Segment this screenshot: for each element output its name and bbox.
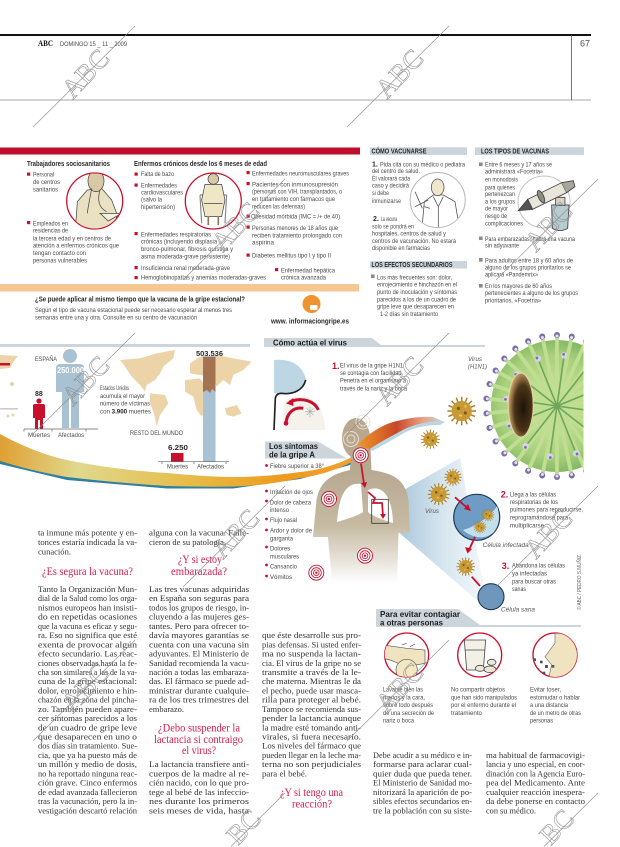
- article column 5: ma habitual de farmacovigi-: [486, 751, 585, 760]
- panel: side effects: LOS EFECTOS SECUNDARIOS: [372, 262, 453, 269]
- article column 2: adyuvantes. El Ministerio de: [149, 650, 249, 658]
- panel: vaccine types: administrará «Focetria»: [485, 169, 543, 176]
- article column 1: no ha reportado ninguna reac-: [38, 769, 137, 778]
- article column 3: para el bebé.: [262, 769, 307, 778]
- watermarks: ABC: [55, 43, 115, 104]
- chart: Spain pictogram: [24, 349, 98, 439]
- captions: prevention advice: manos y la cara,: [383, 694, 425, 701]
- article column 5: lancia y uno especial, en coor-: [486, 760, 585, 769]
- article column 2: alguna con la vacuna. Falle-: [149, 528, 249, 538]
- text block: United States note: Estados Unidos: [100, 385, 129, 392]
- symptom list: musculares: [270, 554, 299, 561]
- heading: avoid infecting others: [376, 609, 581, 628]
- article column 3: Los niveles del fármaco que: [262, 742, 361, 751]
- text block: United States note: acumula el mayor: [100, 393, 145, 400]
- chart: rest of world bars: 6.250: [168, 445, 188, 452]
- article column 2: [149, 528, 250, 815]
- panel: vaccine types: a los grupos: [485, 198, 515, 205]
- heading: how the virus acts: Cómo actúa el virus: [273, 338, 348, 347]
- panel: vaccine types: Para adultos entre 18 y 60 años de: [485, 257, 574, 264]
- page header: ABC: [38, 39, 53, 48]
- article column 2: embarazo.: [149, 705, 184, 714]
- red banner: [0, 148, 360, 154]
- panel: how to get vaccinated: solo se pondrá en: [372, 223, 414, 230]
- article column 2: cuerpos de la madre al re-: [149, 769, 249, 778]
- captions: prevention advice: estornudar o hablar: [530, 694, 580, 701]
- panel: health workers: Empleados en: [33, 220, 68, 228]
- article column 1: vestigación descartó relación: [38, 806, 137, 815]
- panel: chronic patients: Enfermedades: [141, 182, 177, 190]
- article column 2: ra de los tres trimestres del: [149, 696, 250, 705]
- step 3 text: ya infectadas: [512, 570, 547, 577]
- panel: how to get vaccinated: si debe: [372, 190, 389, 197]
- article column 4: Debe acudir a su médico e in-: [373, 751, 472, 760]
- symptom list: [265, 463, 324, 581]
- panel: vaccine types: sin adyuvante: [485, 243, 519, 250]
- article column 4: sibles efectos secundarios en-: [373, 797, 472, 806]
- article column 4: [373, 751, 472, 815]
- panel: chronic patients: en tratamiento con fármacos que: [252, 196, 336, 203]
- article column 3: cia. El virus de la gripe no se: [262, 659, 361, 668]
- panel: chronic patients: (personas con VIH, transplantados, o: [252, 189, 342, 196]
- step 1 text: El virus de la gripe H1N1: [340, 362, 404, 369]
- label: virus H1N1: (H1N1): [468, 364, 487, 370]
- captions: prevention advice: Lavarse bien las: [383, 686, 423, 693]
- article column 2: cluyendo a las mujeres ges-: [149, 613, 249, 622]
- panel: vaccine types: pertenecientes a alguno de los grupos: [485, 290, 578, 297]
- illustration: healthy cell: [478, 584, 504, 610]
- article column 3: terna no son perjudiciales: [262, 760, 361, 769]
- panel: how to get vaccinated: La vacuna: [381, 216, 397, 223]
- panel: vaccine types: para quienes: [485, 184, 515, 191]
- zoom wedge behind lungs: [388, 458, 488, 610]
- panel: health workers: atención a enfermos crónicos que: [33, 242, 120, 250]
- panel: chronic patients: Insuficiencia renal moderada-grave: [141, 265, 231, 272]
- article column 1: que la vacuna es eficaz y segu-: [38, 622, 137, 631]
- captions: prevention advice: Evitar toser,: [530, 686, 561, 694]
- body silhouette: [313, 418, 410, 583]
- panel: vaccine types: En los mayores de 60 años: [485, 283, 552, 290]
- panel: how to get vaccinated: [370, 146, 467, 252]
- panel: chronic patients: Obesidad mórbida (IMC = /+ de 40): [251, 214, 340, 221]
- article column 2: tege al bebé de las infeccio-: [149, 788, 249, 797]
- article column 2: davía mayores garantías se: [149, 631, 249, 640]
- text block: United States note: con 3.900 muertes: [100, 408, 151, 415]
- article column 2: Sanidad recomienda la vacu-: [149, 659, 249, 668]
- article column 1: exenta de provocar algún: [38, 640, 137, 649]
- panel: chronic patients: reducen las defensas): [252, 204, 305, 211]
- text block: seasonal vaccine question: ¿Se puede aplicar al mismo tiempo que la vacuna de la gripe estacional?: [35, 296, 245, 304]
- panel: side effects: punto de inoculación y síntomas: [377, 289, 457, 296]
- article column 1: cer síntomas parecidos a los: [38, 714, 137, 723]
- article column 3: virales, si fuera necesario.: [262, 732, 361, 742]
- chart: Spain pictogram: 88: [35, 391, 43, 398]
- panel: side effects: Los más frecuentes son: dolor,: [377, 274, 452, 281]
- panel: vaccine types: Entre 6 meses y 17 años se: [485, 162, 552, 168]
- article column 4: tre la población con su siste-: [373, 806, 472, 815]
- panel: chronic patients: Enfermedad hepática: [281, 268, 336, 274]
- watermarks: ABC: [369, 43, 429, 104]
- article column 1: ra. Eso no significa que esté: [38, 631, 137, 640]
- article column 2: ¿Y si estoy: [178, 554, 222, 566]
- article column 3: ¿Y si tengo una: [280, 787, 343, 799]
- panel: vaccine types: riesgo de: [485, 213, 507, 220]
- heading: flu symptoms: Los síntomas: [269, 442, 319, 451]
- article column 1: efecto secundario. Las reac-: [38, 650, 137, 658]
- symptom targets on body: [309, 415, 372, 580]
- article column 5: cualquier reacción inespera-: [486, 788, 585, 797]
- panel: chronic patients: Enfermos crónicos desde los 6 meses de edad: [134, 161, 267, 168]
- panel: chronic patients: Personas menores de 18 años que: [252, 225, 338, 232]
- article column 1: do en repetidas ocasiones: [38, 613, 137, 622]
- step 2 text: [483, 490, 583, 549]
- panel: how to get vaccinated: CÓMO VACUNARSE: [372, 146, 427, 156]
- heading: avoid infecting others: a otras personas: [380, 619, 444, 628]
- article column 2: en España son seguras para: [149, 594, 249, 603]
- panel: health workers: tengan contacto con: [33, 250, 87, 257]
- captions: prevention advice: que han sido manipulados: [451, 694, 517, 701]
- chart: Spain pictogram: Afectados: [58, 432, 84, 439]
- panel: vaccine types: complicaciones: [485, 221, 523, 228]
- article column 1: cia, que ya ha puesto más de: [38, 751, 137, 760]
- heading: flu symptoms: [265, 442, 347, 460]
- panel: how to get vaccinated: hospitales, centros de salud y: [372, 230, 447, 237]
- arrow: airway to lungs with detail box: [361, 464, 388, 523]
- article column 2: cieron de su patología.: [149, 538, 226, 547]
- icon: doctor in red circle: [67, 170, 123, 235]
- captions: prevention advice: personas: [530, 718, 553, 725]
- watermarks: ABC: [369, 657, 429, 718]
- icon: glass and pills: [458, 633, 502, 677]
- text block: seasonal vaccine question: semanas entre una y otra. Consulte en su centro de vacunación: [35, 315, 198, 322]
- watermarks: ABC: [55, 350, 115, 411]
- panel: how to get vaccinated: 1.: [372, 162, 378, 168]
- article column 2: lactancia si contraigo: [154, 734, 243, 746]
- chart: Spain pictogram: Muertes: [28, 432, 50, 439]
- section rule: [0, 344, 250, 347]
- article column 3: pias defensas. Si usted enfer-: [262, 640, 361, 649]
- article column 1: ción grave. Cinco enfermos: [38, 779, 137, 788]
- panel: side effects: gripe leve que desaparecen en: [377, 303, 454, 310]
- arrows: virus into cell and out: [455, 497, 480, 586]
- captions: prevention advice: de una secreción de: [383, 710, 435, 717]
- left map fragment: [0, 355, 18, 418]
- panel: side effects: [370, 261, 467, 318]
- article column 2: cién nacido, con lo que pro-: [149, 779, 249, 788]
- article column 1: de un cuadro de gripe leve: [38, 723, 137, 732]
- article column 1: ta inmune más potente y en-: [38, 528, 137, 538]
- step 2 text: Llega a las células: [510, 491, 556, 498]
- article column 2: seis meses de vida, hasta: [149, 806, 249, 815]
- panel: chronic patients: Pacientes con inmunosupresión: [252, 182, 339, 188]
- chart: Spain pictogram: 250.000: [57, 366, 85, 375]
- panel: vaccine types: alguno de los grupos prioritarios se: [485, 264, 571, 271]
- article column 2: tantes. Pero para ofrecer to-: [149, 622, 249, 631]
- step 2 text: multiplicarse: [510, 522, 545, 529]
- article column 1: dos días sin tratamiento. Sue-: [38, 742, 137, 751]
- article column 3: la madre esté tomando anti-: [262, 723, 361, 732]
- step 2 text: Célula infectada: [483, 542, 529, 549]
- panel: health workers: la tercera edad y en centros de: [33, 236, 112, 242]
- panel: health workers: sanitarios: [33, 186, 58, 194]
- watermarks: ABC: [518, 503, 578, 564]
- watermarks: ABC: [55, 657, 115, 718]
- article column 3: pender la lactancia aunque: [262, 714, 361, 723]
- article column 4: quier duda que pueda tener.: [373, 769, 472, 778]
- panel: how to get vaccinated: inmunizarse: [372, 198, 401, 205]
- text block: United States note: número de víctimas: [100, 401, 150, 408]
- text block: seasonal vaccine question: Según el tipo de vacuna estacional puede ser necesario esperar al menos tres: [35, 307, 232, 314]
- panel: how to get vaccinated: centros de vacunación. No estará: [372, 238, 457, 245]
- credit: © ABC / PEDRO S.MUÑIZ: [576, 555, 583, 610]
- article column 1: de edad avanzada fallecieron: [38, 788, 137, 797]
- captions: prevention advice: a una distancia: [530, 702, 569, 709]
- illustration: large H1N1 virus: [483, 332, 584, 480]
- article column 1: ciones observadas hasta la fe-: [38, 659, 137, 668]
- article column 3: el pecho, puede usar masca-: [262, 686, 361, 695]
- article column 1: cuna de la gripe estacional:: [38, 677, 137, 686]
- article column 5: pea del Medicamento. Ante: [486, 779, 585, 788]
- page header: 67: [580, 38, 590, 48]
- article column 4: formarse para aclarar cual-: [373, 760, 472, 769]
- captions: prevention advice: de un metro de otras: [530, 710, 581, 717]
- article column 5: con su médico.: [486, 806, 536, 815]
- chart: rest of world bars: RESTO DEL MUNDO: [130, 430, 183, 437]
- panel: chronic patients: cardiovasculares: [141, 190, 183, 196]
- symptom list: Cansancio: [270, 564, 298, 571]
- icon: syringe and vial: [518, 176, 575, 230]
- article column 1: que desaparecen en uno o: [38, 732, 137, 742]
- article column 3: pueden llegar en la leche ma-: [262, 751, 361, 760]
- panel: vaccine types: de mayor: [485, 206, 508, 213]
- page header: [0, 34, 591, 100]
- step 3 text: Abandona las células: [512, 563, 565, 570]
- article column 5: [486, 751, 585, 815]
- panel: side effects: enrojecimiento e hinchazón en el: [377, 282, 457, 289]
- panel: health workers: [27, 161, 120, 264]
- article column 2: das. El fármaco se puede ad-: [149, 677, 249, 686]
- panel: chronic patients: aspirina: [252, 240, 275, 247]
- panel: health workers: de centros: [33, 179, 60, 186]
- symptom list: garganta: [270, 536, 294, 543]
- label: virus H1N1: Virus: [468, 356, 482, 363]
- step 3 text: Célula sana: [501, 607, 536, 614]
- step 3 text: [501, 561, 565, 614]
- panel: vaccine types: pertenezcan: [485, 191, 515, 198]
- step 1 text: se contagia con facilidad.: [340, 370, 403, 377]
- article column 2: cuenta con una vacuna sin: [149, 640, 249, 649]
- panel: health workers: residencias de: [33, 228, 68, 234]
- article column 2: Las tres vacunas adquiridas: [149, 585, 249, 594]
- panel: chronic patients: crónica avanzada: [281, 274, 327, 282]
- heading: avoid infecting others: Para evitar contagiar: [380, 610, 460, 619]
- article column 4: El Ministerio de Sanidad mo-: [373, 779, 472, 788]
- panel: chronic patients: crónicas (incluyendo displasia: [141, 239, 218, 246]
- article column 1: cunación.: [38, 548, 71, 556]
- captions: prevention advice: sobre todo después: [383, 702, 433, 709]
- step 1 text: través de la nariz y la boca: [340, 386, 408, 393]
- watermarks: ABC: [205, 196, 265, 257]
- chart: rest of world bars: Afectados: [197, 464, 224, 471]
- label: virus: Virus: [425, 508, 439, 515]
- article column 1: tonces estaría indicada la va-: [38, 538, 137, 547]
- orange band: [0, 284, 359, 292]
- article column 2: La lactancia transfiere anti-: [149, 760, 249, 769]
- article column 1: Tanto la Organización Mun-: [38, 585, 137, 594]
- viruses floating: [421, 397, 476, 576]
- watermarks: ABC: [518, 196, 578, 257]
- article column 1: [38, 528, 137, 815]
- panel: chronic patients: [134, 161, 349, 282]
- icon: head cross-section: [274, 360, 325, 430]
- step 2 text: respiratorias de los: [510, 499, 558, 506]
- icon: washing hands: [383, 633, 429, 681]
- article column 1: dial de la Salud como los orga-: [38, 594, 137, 603]
- article column 2: embarazada?: [171, 566, 227, 578]
- icon: person with syringe: [410, 172, 465, 232]
- icon: web logo and address: www. informaciongripe.es: [270, 318, 349, 326]
- article column 1: ¿Es segura la vacuna?: [42, 566, 133, 578]
- panel: vaccine types: en monodosis: [485, 176, 518, 183]
- panel: health workers: personas vulnerables: [33, 258, 87, 264]
- text block: United States note: [100, 385, 151, 415]
- panel: chronic patients: hipertensión): [141, 204, 175, 211]
- article column 2: el virus?: [182, 745, 216, 757]
- icon: web logo and address: [270, 295, 349, 326]
- panel: health workers: Personal: [33, 172, 54, 178]
- article column 1: cha son similares a las de la va-: [38, 668, 137, 677]
- step 1 text: Penetra en el organismo a: [340, 378, 407, 385]
- article column 1: tras la vacunación, pero la in-: [38, 797, 137, 806]
- symptom list: Irritación de ojos: [270, 489, 313, 496]
- panel: side effects: 1-2 días sin tratamiento: [380, 311, 438, 318]
- panel: health workers: Trabajadores sociosanitarios: [27, 161, 110, 168]
- heading: flu symptoms: de la gripe A: [269, 450, 315, 460]
- panel: chronic patients: Hemoglobinopatías y anemias moderadas-graves: [141, 274, 266, 282]
- panel: chronic patients: (salvo la: [141, 196, 163, 204]
- article column 2: ¿Debo suspender la: [158, 722, 240, 734]
- symptom list: Flujo nasal: [270, 517, 297, 524]
- step 1 text: [332, 361, 408, 393]
- captions: prevention advice: [383, 686, 581, 725]
- article column 3: Tampoco se recomienda sus-: [262, 705, 361, 714]
- step 2 text: reprogramándose para: [510, 515, 569, 522]
- panel: how to get vaccinated: caso y decidirá: [372, 183, 409, 190]
- captions: prevention advice: por el enfermo durante el: [451, 702, 516, 709]
- captions: prevention advice: No compartir objetos: [451, 686, 505, 694]
- symptom list: Vómitos: [270, 574, 292, 581]
- panel: chronic patients: Enfermedades neuromusculares graves: [252, 170, 349, 178]
- article column 3: ma no suspenda la lactan-: [262, 650, 361, 658]
- article column 1: nismos europeos han insisti-: [38, 603, 137, 612]
- symptom list: Dolores: [270, 546, 290, 553]
- article column 2: todos los grupos de riesgo, in-: [149, 603, 249, 612]
- article column 1: zo. También pueden apare-: [38, 705, 137, 714]
- chart: rest of world bars: Muertes: [167, 464, 188, 471]
- symptom list: Fiebre superior a 38°: [270, 463, 324, 470]
- step 3 text: sanas: [512, 586, 526, 593]
- article column 1: un millón y medio de dosis,: [38, 760, 137, 769]
- article column 5: dinación con la Agencia Euro-: [486, 769, 585, 778]
- symptom list: intenso: [270, 507, 290, 514]
- chart: Spain pictogram: ESPAÑA: [35, 356, 58, 363]
- page header: DOMINGO 15 _ 11 _ 2009: [60, 41, 128, 48]
- panel: chronic patients: asma moderada-grave persistente): [141, 254, 230, 260]
- article column 1: dolor, enrojecimiento e hin-: [38, 686, 137, 695]
- article column 3: que éste desarrolle sus pro-: [262, 631, 361, 640]
- panel: how to get vaccinated: disponible en farmacias: [372, 245, 430, 252]
- symptom list: Ardor y dolor de: [270, 527, 313, 534]
- panel: chronic patients: Diabetes mellitus tipo I y tipo II: [252, 253, 331, 260]
- captions: prevention advice: tratamiento: [451, 710, 483, 717]
- panel: how to get vaccinated: Él valorará cada: [372, 175, 410, 182]
- panel: chronic patients: Falta de bazo: [141, 171, 174, 178]
- swoosh: [0, 417, 445, 488]
- panel: chronic patients: reciben tratamiento prolongado con: [252, 232, 343, 240]
- panel: vaccine types: prioritarios, «Focetria»: [485, 297, 542, 304]
- icon: sneezing face: [531, 633, 580, 680]
- panel: vaccine types: [475, 147, 584, 304]
- step 1 text: 1.: [332, 361, 340, 371]
- step 3 text: para buscar otras: [512, 578, 556, 585]
- panel: how to get vaccinated: Pida cita con su médico o pediatra: [380, 162, 465, 168]
- panel: how to get vaccinated: del centro de salud.: [372, 168, 420, 175]
- chart: rest of world bars: 503.536: [196, 351, 223, 358]
- label: virus H1N1: [468, 356, 487, 370]
- article column 3: [262, 631, 361, 810]
- panel: side effects: parecidos a los de un cuadro de: [377, 296, 456, 303]
- step 2 text: pulmones para reproducirse,: [510, 507, 583, 514]
- text block: seasonal vaccine question: [35, 296, 245, 322]
- step 2 text: 2.: [501, 490, 508, 500]
- article column 5: da debe ponerse en contacto: [486, 797, 585, 806]
- article column 3: che materna. Mientras le da: [262, 677, 361, 686]
- article column 2: ministrar durante cualquie-: [149, 686, 249, 695]
- step 3 text: 3.: [502, 561, 509, 571]
- article column 3: rilla para proteger al bebé.: [262, 696, 361, 705]
- article column 1: chazón en la zona del pincha-: [38, 696, 137, 705]
- panel: chronic patients: bronco-pulmonar, fibrosis quística y: [141, 246, 234, 253]
- panel: how to get vaccinated: 2.: [373, 216, 379, 223]
- world map: [120, 350, 252, 427]
- chart: rest of world bars: [130, 351, 229, 471]
- panel: chronic patients: Enfermedades respiratorias: [141, 232, 211, 238]
- article column 2: nes durante los primeros: [149, 797, 249, 806]
- symptom list: Dolor de cabeza: [270, 499, 312, 506]
- watermarks: ABC: [369, 350, 429, 411]
- article column 4: nitorizará la aparición de po-: [373, 788, 472, 797]
- watermarks: ABC: [205, 503, 265, 564]
- illustration: infected cell: [454, 494, 500, 540]
- article column 3: reacción?: [292, 798, 332, 810]
- panel: vaccine types: Para embarazadas, habrá una vacuna: [485, 236, 575, 243]
- article column 3: transmite a través de la le-: [262, 668, 361, 677]
- captions: prevention advice: nariz o boca: [383, 718, 415, 725]
- heading: how the virus acts: [264, 338, 485, 347]
- article column 2: nación a todas las embaraza-: [149, 668, 249, 677]
- panel: vaccine types: aplicará «Pandemrix»: [485, 272, 538, 279]
- panel: vaccine types: LOS TIPOS DE VACUNAS: [481, 148, 549, 156]
- icon: elderly woman with walker in red circle: [185, 173, 241, 229]
